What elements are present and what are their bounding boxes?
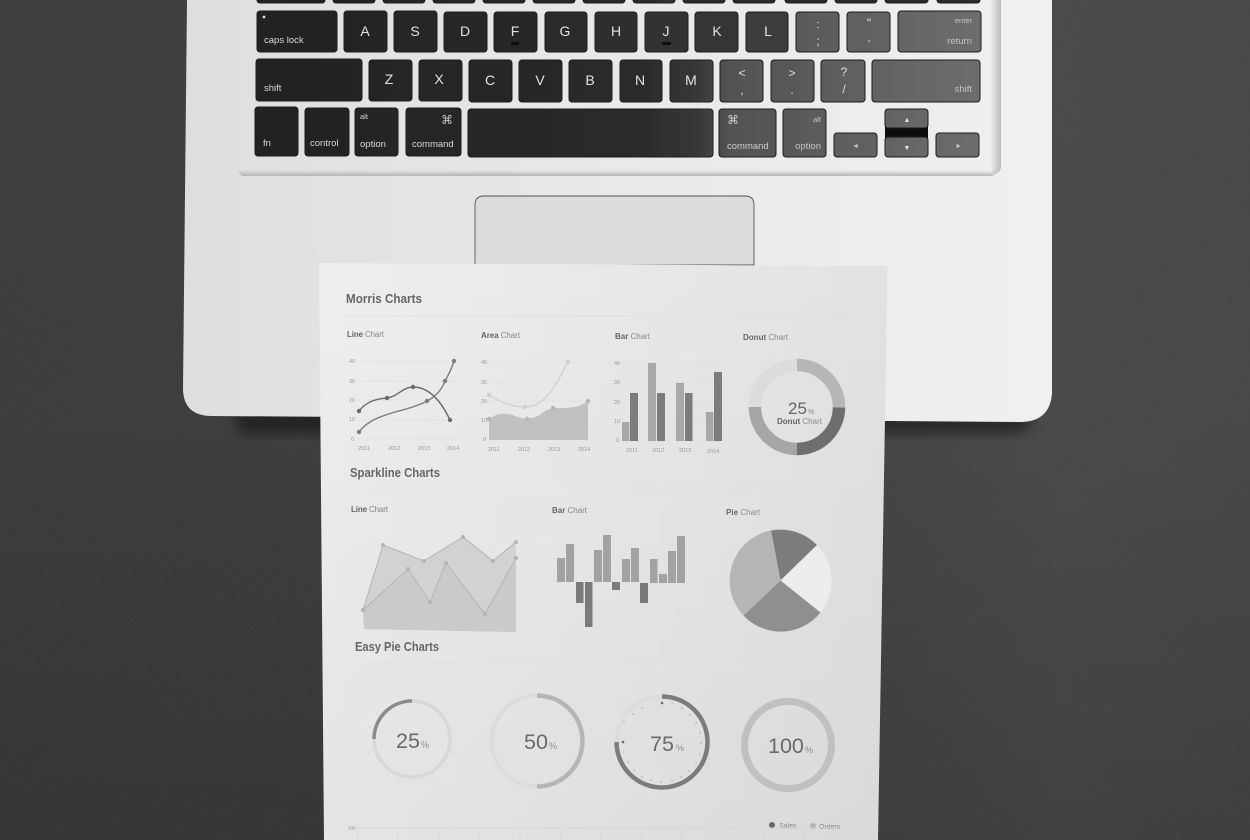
gauge: 25 percent: [367, 693, 457, 785]
panel: morris area chart: [481, 331, 590, 453]
axis labels: 2012: [652, 448, 664, 454]
dark bars: [630, 372, 722, 441]
gauge: 75 percent: 75: [650, 732, 674, 756]
home key row: enter: [955, 16, 972, 25]
axis labels: 2013: [679, 448, 691, 454]
gauge: 75 percent: %: [676, 743, 684, 753]
home key row: return: [947, 36, 972, 47]
axis labels: [349, 359, 459, 452]
heading: Sparkline Charts: Sparkline Charts: [350, 466, 440, 480]
axis labels: 0: [351, 437, 354, 443]
heading: Easy Pie Charts: Easy Pie Charts: [355, 640, 439, 654]
donut segment: top right: [797, 365, 839, 408]
home key row: :: [816, 19, 820, 31]
shift key row: shift: [264, 83, 282, 94]
shift key row: C: [485, 72, 495, 88]
home key row: L: [764, 23, 772, 39]
positive bars: [557, 535, 685, 583]
bottom key row: ⌘: [727, 113, 739, 127]
axis labels: 30: [614, 380, 620, 386]
axis labels: 40: [614, 361, 620, 367]
shift key row: ,: [740, 83, 744, 97]
shift key row: X: [434, 71, 444, 87]
home key row: ": [867, 16, 871, 30]
bottom key row: command: [727, 141, 769, 152]
bottom key row: ◄: [852, 143, 859, 150]
axis labels: 2014: [707, 449, 719, 455]
gauge: 100 percent: %: [805, 745, 813, 755]
series: rising line: [357, 359, 456, 434]
panel: sparkline bar chart: [552, 506, 685, 627]
axis labels: 2014: [578, 447, 590, 453]
bottom key row: option: [360, 139, 386, 150]
axis labels: 20: [349, 398, 355, 404]
keyboard keys: [255, 0, 981, 157]
shift key row: V: [535, 72, 545, 88]
axis labels: 2013: [548, 447, 560, 453]
bottom key row: option: [795, 141, 821, 152]
panel: sparkline line chart: Line Chart: [351, 505, 389, 514]
bottom key row: ►: [955, 143, 962, 150]
home key row: S: [410, 23, 420, 39]
bottom chart legend: Sales: [779, 823, 797, 830]
shift key row: M: [685, 72, 697, 88]
shift key row: ?: [841, 65, 848, 79]
panel: morris area chart: Area Chart: [481, 331, 521, 340]
panel: pie chart: Pie Chart: [726, 508, 761, 517]
bottom chart gridlines: 100: [348, 826, 356, 830]
pie slice: pale: [730, 530, 780, 616]
donut segment: bottom right: [797, 408, 839, 449]
pie slice: dark: [771, 530, 817, 580]
axis labels: [481, 360, 590, 453]
axis labels: 2011: [488, 447, 500, 453]
home key row: H: [611, 23, 621, 39]
gauge: 25 percent: %: [421, 740, 429, 750]
axis labels: 0: [616, 438, 619, 444]
shift key row: /: [842, 82, 846, 96]
panel: morris line chart: Line Chart: [347, 330, 385, 339]
axis labels: 2011: [626, 448, 638, 454]
bottom key row: ▼: [904, 145, 910, 152]
bottom key row: command: [412, 139, 454, 150]
axis labels: 0: [483, 437, 486, 443]
pie slice: light: [780, 545, 832, 612]
bottom key row: fn: [263, 138, 271, 149]
shift key row: Z: [385, 71, 394, 87]
home key row: [257, 11, 981, 52]
bottom key row: alt: [813, 115, 822, 124]
panel: donut chart: Donut Chart: [777, 417, 823, 426]
home key row: ,: [867, 30, 871, 44]
bottom key row: [255, 107, 979, 157]
area series: [489, 401, 588, 440]
bottom key row: ⌘: [441, 113, 453, 127]
axis labels: 2012: [518, 447, 530, 453]
gauge: 75 percent: [616, 696, 708, 788]
home key row: ;: [816, 34, 820, 48]
function key row: [257, 0, 980, 3]
donut segment: bottom left: [755, 407, 797, 449]
bottom key row: ▲: [904, 117, 910, 124]
upper area series: [363, 537, 516, 632]
heading: Morris Charts: Morris Charts: [346, 292, 422, 306]
axis labels: 2011: [358, 446, 370, 452]
gauge: 50 percent: %: [549, 741, 557, 751]
gauge: 50 percent: [492, 696, 582, 786]
laptop body: [183, 0, 1052, 422]
area markers: [487, 399, 590, 421]
panel: sparkline bar chart: Bar Chart: [552, 506, 588, 515]
light bars: [622, 363, 714, 441]
home key row: K: [712, 23, 722, 39]
donut value: 25: [788, 399, 807, 418]
donut segment: top left: [755, 365, 797, 407]
shift key row: >: [788, 66, 796, 80]
axis labels: 30: [349, 379, 355, 385]
panel: sparkline line chart: [351, 505, 518, 632]
shift key row: [256, 59, 980, 102]
gauge: 50 percent: 50: [524, 730, 548, 754]
axis labels: 30: [481, 380, 487, 386]
shift key row: shift: [955, 84, 972, 95]
shift key row: <: [738, 66, 746, 80]
axis labels: 20: [481, 399, 487, 405]
trackpad: [475, 196, 754, 265]
shift key row: B: [585, 72, 595, 88]
axis labels: [614, 361, 719, 455]
shift key row: .: [790, 83, 794, 97]
panel: pie chart: [726, 508, 832, 632]
bottom key row: control: [310, 138, 339, 149]
light line series: [487, 360, 570, 409]
home key row: J: [662, 23, 670, 39]
axis labels: 10: [614, 419, 620, 425]
bottom chart legend: Orders: [819, 824, 841, 831]
gauge: 25 percent: 25: [396, 729, 420, 753]
axis labels: 2012: [388, 446, 400, 452]
bottom key row: alt: [360, 112, 369, 121]
gauge: 100 percent: 100: [768, 734, 804, 758]
home key row: D: [460, 23, 470, 39]
printed report sheet: [319, 263, 888, 840]
lower area series: [363, 558, 516, 632]
axis labels: 20: [614, 400, 620, 406]
axis labels: 2014: [447, 446, 459, 452]
home key row: caps lock: [264, 35, 304, 46]
keyboard well: [234, 0, 1001, 176]
axis labels: 10: [481, 418, 487, 424]
axis labels: 40: [349, 359, 355, 365]
panel: donut chart: Donut Chart: [743, 333, 789, 342]
panel: morris bar chart: Bar Chart: [615, 332, 651, 341]
gauge: 100 percent: [744, 702, 832, 788]
panel: morris bar chart: [614, 332, 722, 455]
home key row: F: [511, 23, 519, 39]
axis labels: 2013: [418, 446, 430, 452]
panel: donut chart: [743, 333, 839, 449]
home key row: A: [360, 23, 370, 39]
panel: donut chart: %: [808, 409, 814, 416]
axis labels: 10: [349, 417, 355, 423]
home key row: G: [560, 23, 570, 39]
shift key row: N: [635, 72, 645, 88]
laptop shadow on desk: [230, 400, 1030, 434]
negative bars: [576, 582, 648, 627]
pie slice: mid: [744, 580, 820, 632]
series: falling line: [357, 385, 452, 422]
line markers: [362, 536, 518, 616]
panel: morris line chart: [347, 330, 459, 452]
axis labels: 40: [481, 360, 487, 366]
bottom chart legend: [769, 822, 841, 831]
bottom chart gridlines: [348, 826, 846, 840]
